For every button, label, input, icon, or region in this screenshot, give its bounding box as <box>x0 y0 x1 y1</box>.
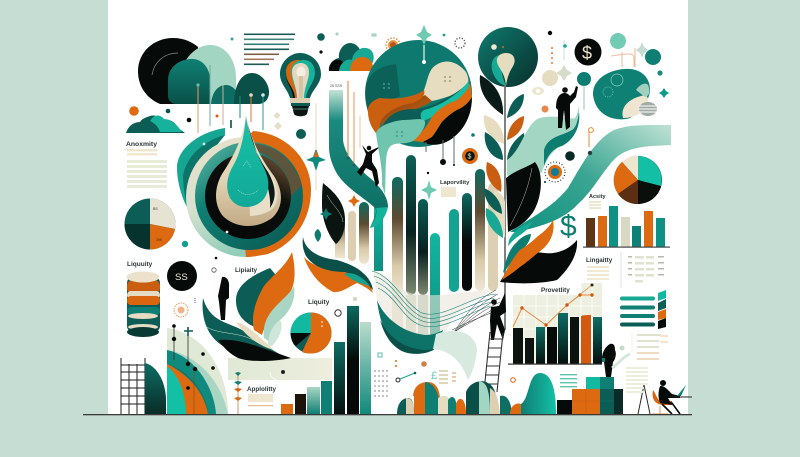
orange crescent <box>240 131 311 257</box>
heading: Liqulty: Liquity <box>308 299 330 306</box>
top right icons: $ <box>582 43 592 63</box>
heading: Applolitty: Applolitty <box>247 386 277 393</box>
icon: dollar coin small <box>462 148 478 164</box>
icon: orange gear <box>386 38 400 52</box>
pie small left <box>124 198 176 250</box>
beige blob <box>423 61 468 101</box>
mint lines above blocks <box>560 374 577 387</box>
list and chart details far right <box>626 333 668 393</box>
top right icons <box>532 31 669 112</box>
decorative dots top left <box>129 32 375 139</box>
large cloud group <box>138 38 269 104</box>
leaf group centre left <box>203 252 295 361</box>
wide teal swoosh <box>510 125 671 232</box>
heading: Lingaitty: Lingaitty <box>586 257 613 264</box>
bottom bars left <box>281 306 371 414</box>
white panel <box>108 0 688 415</box>
plant <box>478 27 538 330</box>
icon: SS coin: SS <box>175 272 188 283</box>
right orange leaves <box>500 220 577 283</box>
black disc <box>205 153 291 239</box>
icon: dancing silhouette <box>357 145 381 187</box>
heading: Anoxmity: Anoxmity <box>126 141 157 148</box>
heading: Liquuity: Liquuity <box>127 261 153 268</box>
heading: Provetlity: Provetlity <box>541 287 570 294</box>
icon: SS coin <box>167 261 197 291</box>
table top right <box>621 252 664 288</box>
ladder <box>484 332 503 392</box>
heading: Acsity: Acsity <box>589 194 606 200</box>
teal blob right <box>593 69 657 119</box>
small cloud left <box>126 115 185 133</box>
pie small left: BS <box>153 207 158 211</box>
small connector icons <box>378 353 456 383</box>
black leaf <box>506 162 541 232</box>
icon: grid <box>121 358 145 414</box>
person at laptop <box>628 380 692 414</box>
pie chart right <box>614 156 662 204</box>
large dollar glyph: $ <box>560 210 577 243</box>
ribbon with tick lines <box>329 81 388 228</box>
base disc <box>365 40 472 147</box>
star: orange and teal <box>306 103 326 190</box>
note lines under Applolitty <box>248 394 273 406</box>
dark stripe <box>248 125 275 208</box>
small connector icons: £ <box>431 370 437 382</box>
lines under Lingaitty <box>587 266 609 280</box>
list lines top <box>244 34 295 65</box>
droplet circle <box>177 115 311 257</box>
blocks <box>557 377 623 414</box>
standing silhouette <box>599 344 616 377</box>
note under Acsity <box>589 201 601 209</box>
small dots top center <box>373 33 475 137</box>
label: 26 SSS: 26 SSS <box>330 84 343 88</box>
bright wave <box>421 82 471 121</box>
teal disc <box>195 142 303 250</box>
left wave leaves <box>303 229 373 293</box>
central bars <box>335 155 498 340</box>
dot matrix <box>374 370 388 397</box>
pie chart centre <box>290 312 332 354</box>
teal bars with flags <box>620 290 666 329</box>
icon: sun coin <box>544 151 575 183</box>
bottom mounds <box>397 373 556 414</box>
dark teal wave <box>382 83 470 127</box>
decorative dots lower left <box>174 241 217 317</box>
ring marker <box>335 310 341 316</box>
tan drop <box>216 115 281 226</box>
icon: dotted circle <box>455 38 465 48</box>
concentric arcs <box>167 324 332 414</box>
star and note <box>421 180 456 200</box>
teal drop <box>227 116 268 207</box>
branch mint <box>612 354 630 368</box>
heading: Laporvility: Laporvility <box>440 180 470 186</box>
heading: Lipiaity: Lipiaity <box>235 267 258 274</box>
baseline <box>83 414 692 415</box>
leaf small near ribbon <box>320 183 360 244</box>
silhouette on leaf <box>218 277 229 320</box>
flowing wave <box>372 270 500 380</box>
left teal swoosh <box>177 128 225 207</box>
small cloud top center <box>329 43 374 71</box>
bar chart right <box>583 206 670 248</box>
mint drip <box>376 119 425 195</box>
central circle with waves <box>365 25 472 195</box>
orange wave right <box>413 83 472 142</box>
beige to mint ring <box>186 137 306 257</box>
coin stack <box>126 272 160 337</box>
orange wave left <box>368 90 424 135</box>
climbing silhouette <box>490 293 506 340</box>
pie small left: 398 <box>156 238 162 242</box>
figure on swoosh <box>556 86 578 130</box>
mint swoosh behind black leaf <box>507 106 579 186</box>
icon: dollar coin small: $ <box>468 154 472 160</box>
black wedge <box>423 97 472 145</box>
line and bar chart <box>508 283 602 365</box>
droplines under cloud <box>196 65 265 133</box>
sprout <box>234 372 242 414</box>
dome teal <box>145 363 166 414</box>
brown wave <box>380 95 432 127</box>
text block lines left <box>127 149 167 188</box>
icon: light bulb <box>280 53 321 116</box>
upper left lobe <box>366 64 400 112</box>
